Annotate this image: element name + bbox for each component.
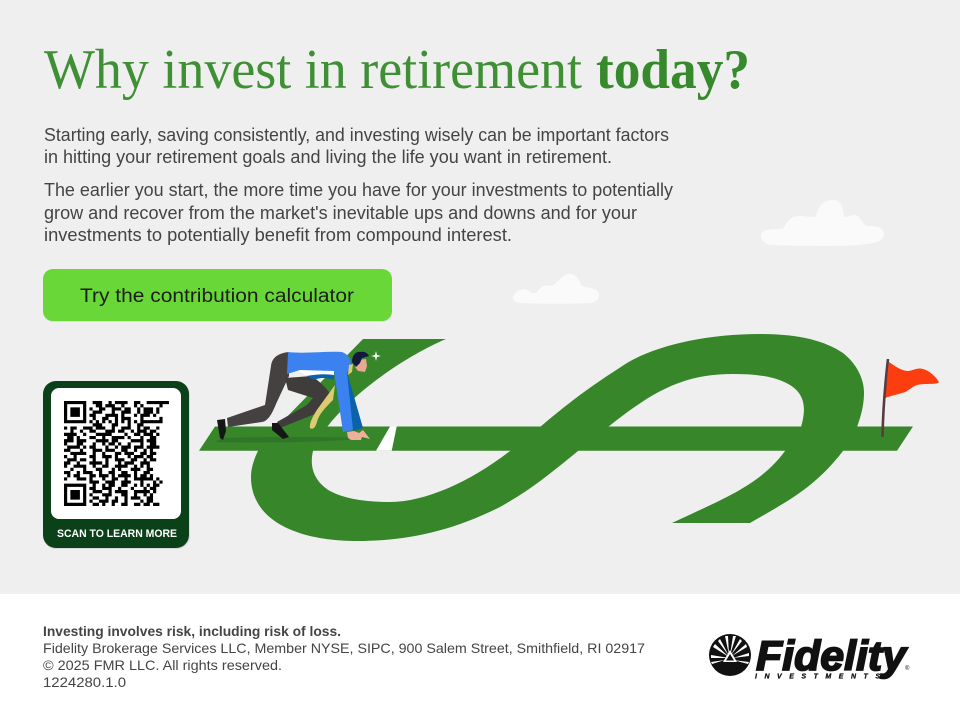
collar and tie knot	[348, 364, 353, 375]
icon: runner in starting position	[217, 352, 370, 440]
icon: small cloud	[513, 274, 599, 304]
back shoe	[217, 419, 226, 440]
text block: disclosures: Investing involves risk, including risk of loss.	[43, 623, 341, 639]
text block: disclosures	[43, 623, 645, 690]
front leg	[277, 376, 331, 428]
text block: intro paragraph	[44, 125, 669, 167]
logo wordmark: Fidelity	[756, 632, 909, 679]
text block: disclosures: © 2025 FMR LLC. All rights reserved.	[43, 657, 282, 673]
text block: second paragraph	[44, 180, 673, 245]
text block: intro paragraph: in hitting your retirement goals and living the life you want in retirement.	[44, 147, 612, 167]
QR panel	[43, 381, 190, 549]
dollar sign track	[199, 334, 913, 541]
text block: disclosures: Fidelity Brokerage Services LLC, Member NYSE, SIPC, 900 Salem Street, Smithfield, RI 02917	[43, 640, 645, 656]
face	[355, 359, 367, 372]
registered mark: ®	[905, 665, 910, 672]
title emphasis: today?	[596, 39, 750, 101]
QR code	[64, 403, 169, 504]
text block: intro paragraph: Starting early, saving consistently, and investing wisely can be important factors	[44, 125, 669, 145]
text block: second paragraph: investments to potentially benefit from compound interest.	[44, 225, 512, 245]
logo subline: INVESTMENTS	[755, 674, 880, 680]
text block: second paragraph: The earlier you start, the more time you have for your investments to potentially	[44, 180, 673, 200]
tie	[310, 385, 335, 429]
jacket	[287, 352, 353, 432]
text block: second paragraph: grow and recover from the market's inevitable ups and downs and for your	[44, 203, 637, 223]
panel: footer	[0, 594, 960, 720]
shirt and lining	[297, 369, 334, 375]
icon: large cloud	[761, 200, 884, 246]
button: contribution calculator	[43, 269, 392, 322]
start-to-finish bar	[199, 426, 913, 451]
text block: disclosures: 1224280.1.0	[43, 674, 126, 690]
rear arm	[342, 372, 363, 431]
back leg	[227, 352, 289, 427]
title: Why invest in retirement	[44, 39, 582, 101]
icon: sparkle	[371, 351, 381, 361]
front shoe	[272, 423, 289, 439]
hands	[347, 430, 370, 440]
QR caption: SCAN TO LEARN MORE	[57, 528, 177, 540]
ground shadow	[215, 437, 375, 442]
dollar S curve	[251, 334, 864, 541]
hair	[352, 352, 369, 367]
button: contribution calculator: Try the contribution calculator	[80, 286, 355, 307]
starting line	[376, 426, 397, 451]
icon: red finish flag	[882, 359, 939, 437]
logo sunburst	[709, 634, 751, 676]
logo: Fidelity Investments	[709, 632, 910, 680]
